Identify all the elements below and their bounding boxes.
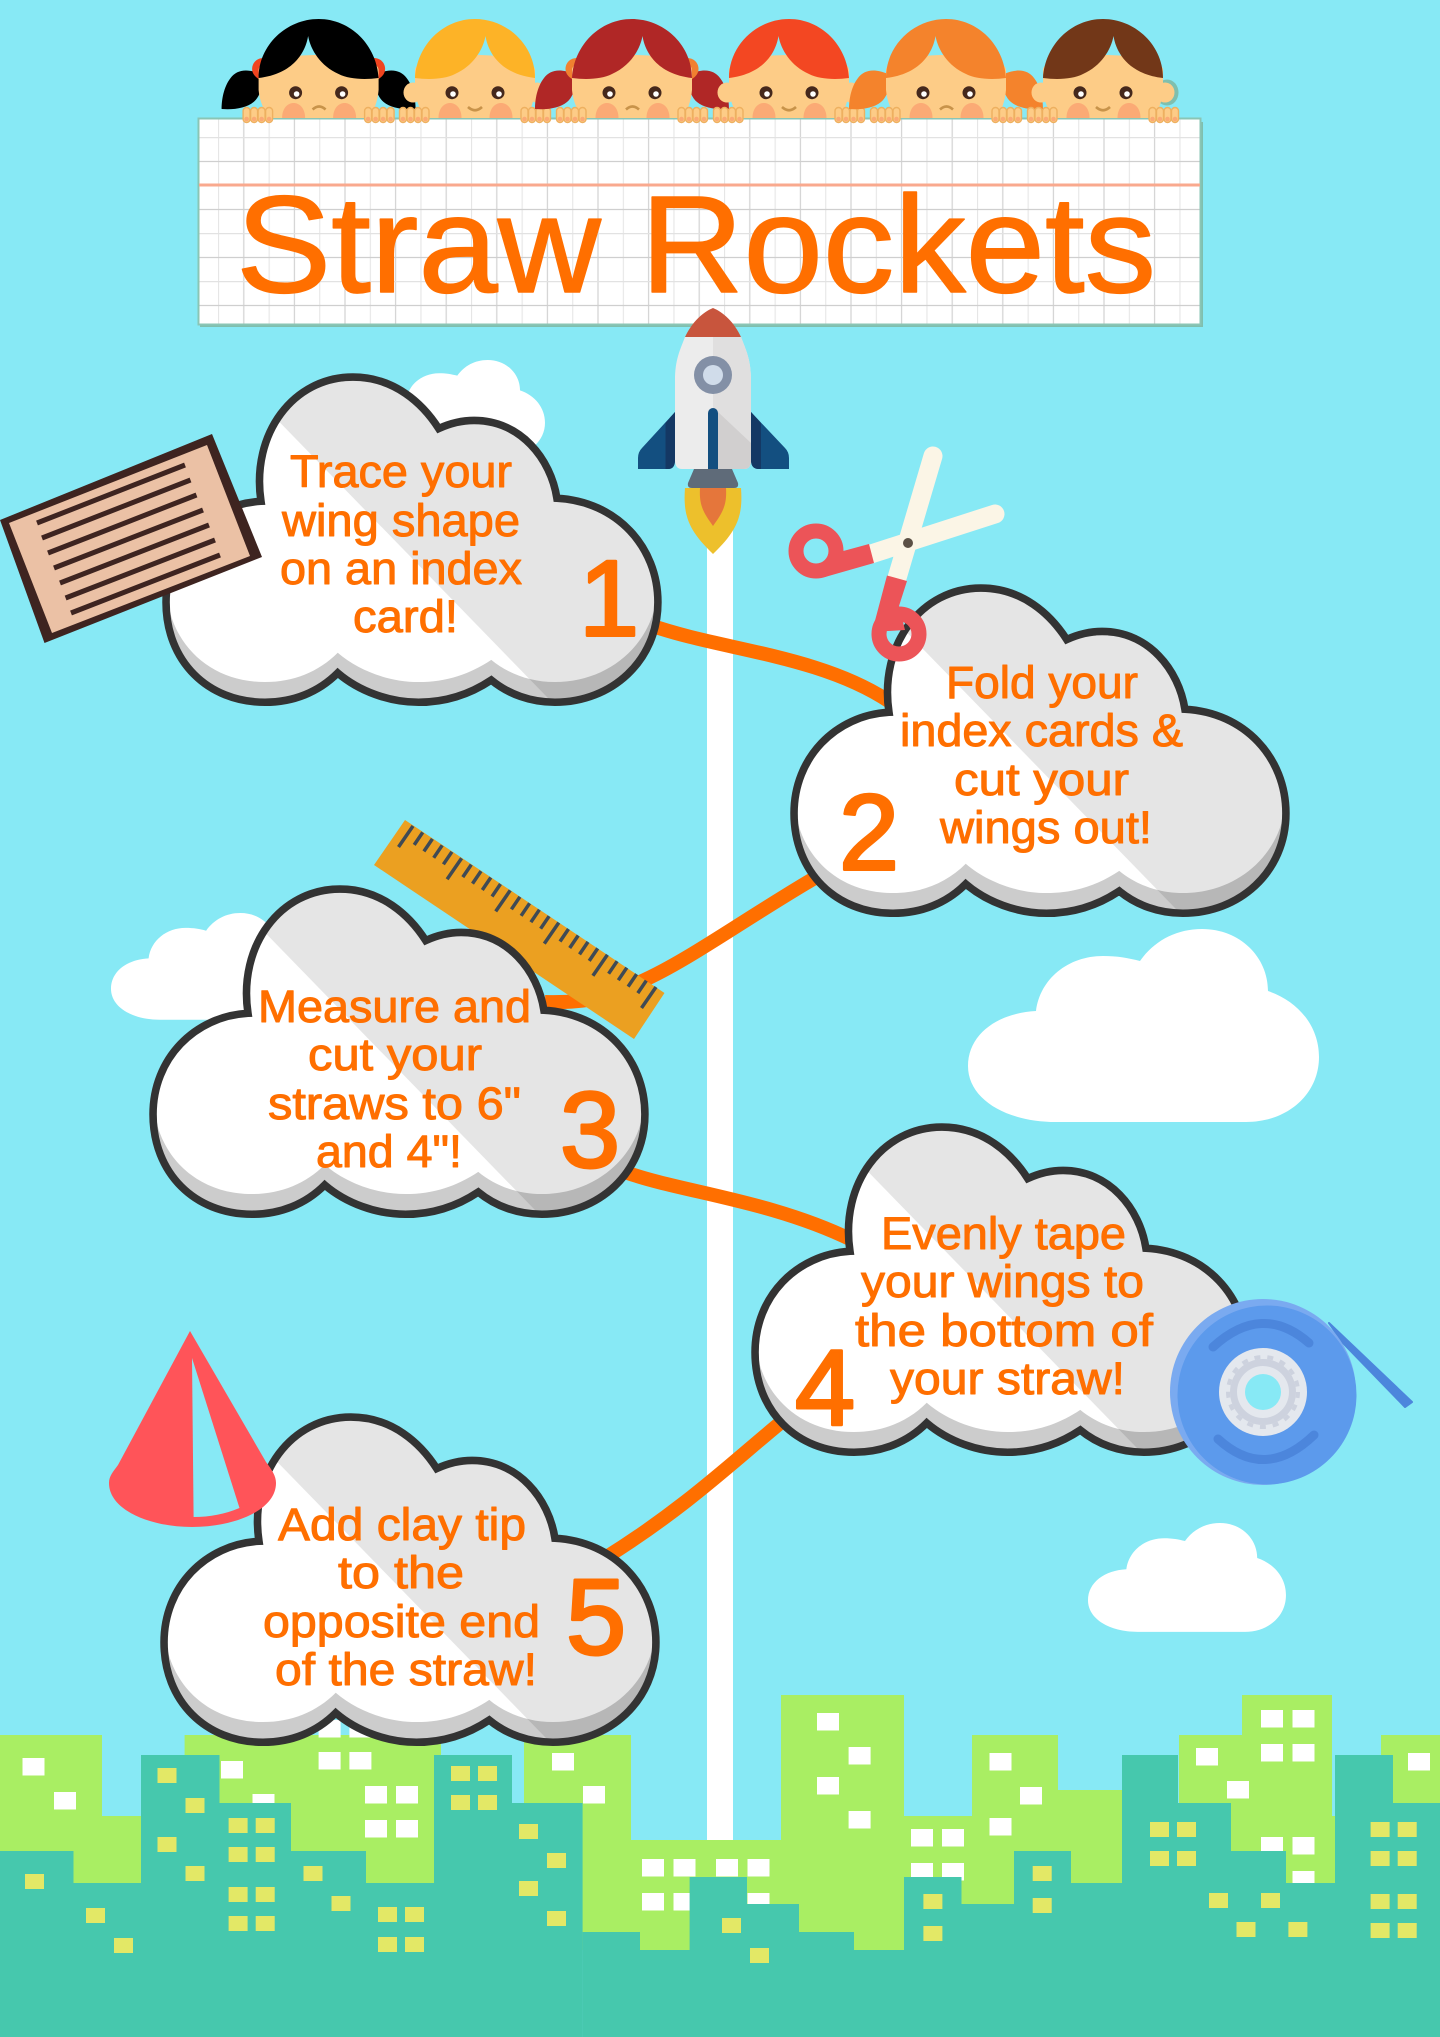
step 2 text: wings out! bbox=[939, 802, 1152, 853]
panel: step 3 bbox=[153, 869, 654, 1223]
step 3 text: straws to 6" bbox=[268, 1078, 521, 1129]
window bbox=[694, 356, 732, 394]
step 4 text: Evenly tape bbox=[881, 1208, 1126, 1259]
cloud 1 bbox=[166, 357, 667, 711]
body bbox=[675, 337, 751, 469]
nose bbox=[685, 308, 741, 337]
kid 3 dark red hair bbox=[535, 19, 729, 122]
connector 1 to 2 bbox=[650, 625, 890, 702]
kid 6 brown hair bbox=[1028, 19, 1178, 122]
step 4 text: the bottom of bbox=[855, 1305, 1154, 1356]
cloud behind step 1 bbox=[373, 360, 545, 455]
panel: step 2 bbox=[794, 568, 1295, 922]
step 2 text: cut your bbox=[954, 754, 1129, 805]
panel: step 5 bbox=[164, 1397, 665, 1751]
yellow windows bbox=[25, 1766, 1417, 1963]
kid 5 orange hair bbox=[849, 19, 1043, 122]
large cloud right bbox=[968, 929, 1319, 1122]
step 5 text: opposite end bbox=[263, 1596, 540, 1647]
number 5: 5 bbox=[566, 1556, 626, 1677]
step 2 text: index cards & bbox=[900, 705, 1183, 756]
connector 4 to 5 bbox=[605, 1415, 790, 1558]
rocket bbox=[638, 308, 789, 554]
step 5 text bbox=[263, 1499, 540, 1695]
step 5 text: to the bbox=[338, 1547, 464, 1598]
icon: index card bbox=[0, 434, 262, 643]
number 1: 1 bbox=[579, 538, 639, 658]
cloud 2 bbox=[794, 568, 1295, 922]
stripe bbox=[708, 408, 718, 469]
icon: clay cone bbox=[109, 1331, 276, 1527]
cloud 4 bbox=[755, 1107, 1256, 1461]
straw centre line bbox=[707, 500, 733, 1845]
connector lines bbox=[545, 625, 890, 1558]
step 3 text: and 4"! bbox=[316, 1126, 462, 1177]
flame bbox=[685, 488, 741, 554]
step 4 text: your wings to bbox=[861, 1256, 1144, 1307]
wings bbox=[638, 412, 675, 469]
step 2 text bbox=[900, 657, 1183, 853]
kid 4 red hair bbox=[714, 19, 864, 122]
number 3: 3 bbox=[560, 1069, 620, 1190]
step 1 text: Trace your bbox=[290, 446, 512, 497]
step 4 text bbox=[855, 1208, 1154, 1404]
connector 3 to 4 bbox=[625, 1172, 852, 1240]
number 2: 2 bbox=[839, 772, 899, 892]
step 2 text: Fold your bbox=[946, 657, 1138, 708]
nozzle bbox=[688, 469, 738, 488]
back buildings bbox=[0, 1695, 1440, 1950]
small cloud right bbox=[1088, 1523, 1286, 1632]
step 1 text: wing shape bbox=[281, 495, 520, 546]
step 5 text: of the straw! bbox=[275, 1644, 537, 1695]
panel: step 1 bbox=[166, 357, 667, 711]
title: Straw Rockets bbox=[236, 168, 1156, 322]
cloud 3 bbox=[153, 869, 654, 1223]
kids peeking over the paper bbox=[222, 19, 1179, 122]
step 4 text: your straw! bbox=[890, 1353, 1125, 1404]
icon: scissors bbox=[796, 456, 995, 654]
connector 2 to 3 bbox=[545, 872, 825, 1002]
city skyline bbox=[0, 1695, 1440, 2037]
icon: tape roll bbox=[1170, 1299, 1412, 1485]
step 1 text: on an index bbox=[280, 543, 523, 594]
step 1 text bbox=[280, 446, 523, 642]
number 4: 4 bbox=[795, 1327, 855, 1448]
step 1 text: card! bbox=[353, 591, 458, 642]
cloud 5 bbox=[164, 1397, 665, 1751]
cloud behind step 3 bbox=[111, 913, 305, 1020]
step 5 text: Add clay tip bbox=[278, 1499, 526, 1550]
step 3 text bbox=[258, 981, 531, 1177]
white windows bbox=[22, 1710, 1430, 1910]
step 3 text: cut your bbox=[308, 1029, 482, 1080]
icon: ruler bbox=[374, 820, 664, 1039]
kid 1 black hair bbox=[222, 19, 416, 122]
title paper bbox=[198, 118, 1203, 327]
panel: step 4 bbox=[755, 1107, 1256, 1461]
background clouds bbox=[111, 360, 1319, 1632]
step 3 text: Measure and bbox=[258, 981, 531, 1032]
front buildings bbox=[0, 1755, 1440, 2037]
kid 2 yellow hair bbox=[400, 19, 550, 122]
